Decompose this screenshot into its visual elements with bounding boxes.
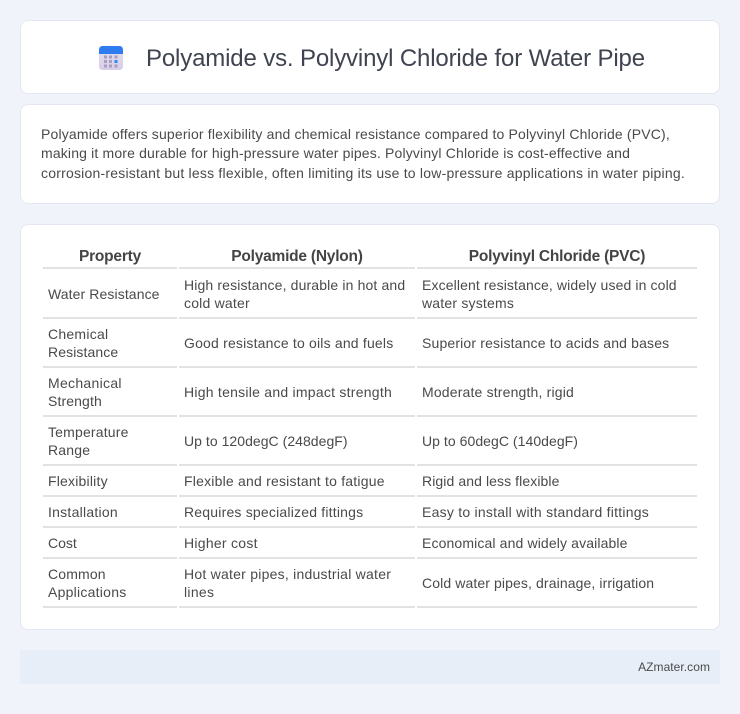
summary text: corrosion-resistant but less flexible, often limiting its use to low-pressure applications in water piping. xyxy=(41,165,685,181)
comparison table: Requires specialized fittings xyxy=(184,504,363,520)
comparison table: Rigid and less flexible xyxy=(422,473,559,489)
footer credit: AZmater.com xyxy=(638,660,710,674)
panel: summary xyxy=(20,104,720,204)
comparison table: Hot water pipes, industrial water xyxy=(184,566,391,582)
comparison table: Economical and widely available xyxy=(422,535,628,551)
column heading: pvc: Polyvinyl Chloride (PVC) xyxy=(469,248,645,265)
comparison table: Superior resistance to acids and bases xyxy=(422,335,669,351)
summary text xyxy=(41,126,685,181)
comparison table: Good resistance to oils and fuels xyxy=(184,335,393,351)
summary text: Polyamide offers superior flexibility and chemical resistance compared to Polyvinyl Chloride (PVC), xyxy=(41,126,670,142)
comparison table: Strength xyxy=(48,393,102,409)
comparison table: Up to 120degC (248degF) xyxy=(184,433,348,449)
panel: comparison table xyxy=(20,224,720,630)
column heading: polyamide: Polyamide (Nylon) xyxy=(231,248,363,265)
comparison table: Higher cost xyxy=(184,535,258,551)
comparison table: Mechanical xyxy=(48,375,122,391)
comparison table: lines xyxy=(184,584,214,600)
comparison table: High resistance, durable in hot and xyxy=(184,277,405,293)
comparison table: Common xyxy=(48,566,106,582)
comparison table: Flexibility xyxy=(48,473,108,489)
comparison table: Up to 60degC (140degF) xyxy=(422,433,578,449)
summary text: making it more durable for high-pressure water pipes. Polyvinyl Chloride is cost-effective and xyxy=(41,145,630,161)
footer bar xyxy=(20,650,720,684)
comparison table: High tensile and impact strength xyxy=(184,384,392,400)
comparison table: cold water xyxy=(184,295,250,311)
comparison table: Cold water pipes, drainage, irrigation xyxy=(422,575,654,591)
comparison table: Chemical xyxy=(48,326,108,342)
comparison table: Excellent resistance, widely used in cold xyxy=(422,277,677,293)
comparison table: Cost xyxy=(48,535,77,551)
comparison table: Moderate strength, rigid xyxy=(422,384,574,400)
comparison table: Flexible and resistant to fatigue xyxy=(184,473,385,489)
comparison table: Applications xyxy=(48,584,126,600)
title: Polyamide vs. Polyvinyl Chloride for Water Pipe xyxy=(146,45,645,72)
comparison table: Easy to install with standard fittings xyxy=(422,504,649,520)
comparison table: Installation xyxy=(48,504,118,520)
comparison table: Resistance xyxy=(48,344,118,360)
header panel xyxy=(20,20,720,94)
comparison table: Range xyxy=(48,442,90,458)
icon: calendar xyxy=(99,46,123,70)
comparison table: Water Resistance xyxy=(48,286,160,302)
comparison table: Temperature xyxy=(48,424,129,440)
column heading: property: Property xyxy=(79,248,141,265)
comparison table: water systems xyxy=(422,295,514,311)
